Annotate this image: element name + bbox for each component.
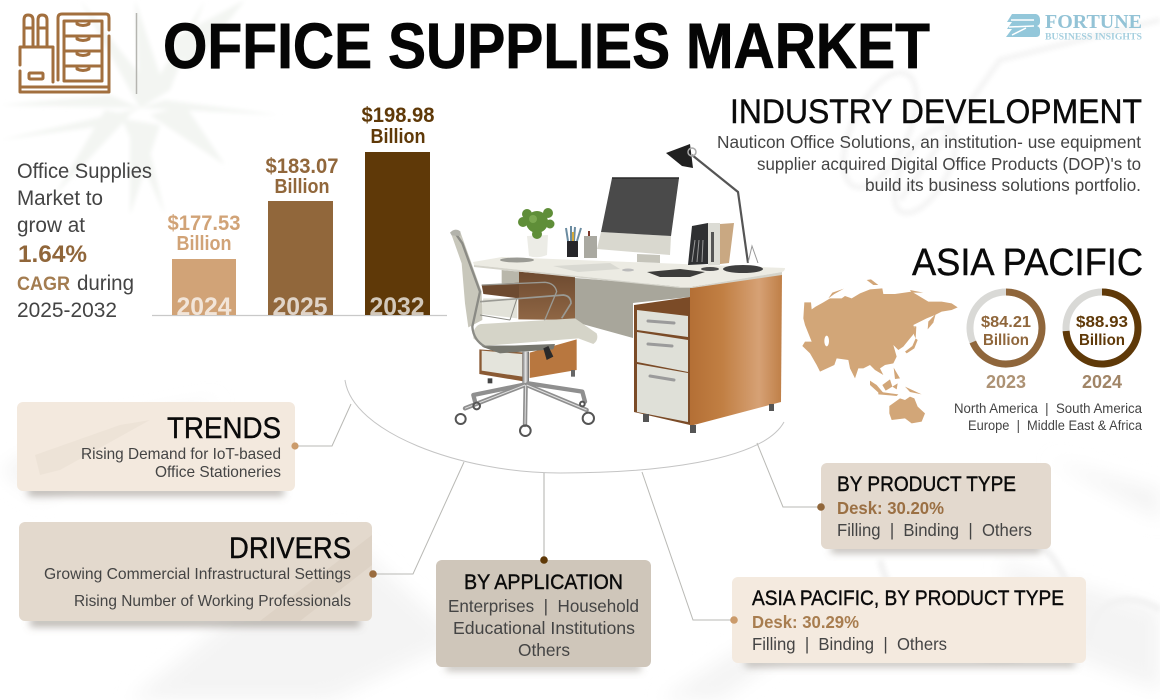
panel: drivers xyxy=(19,522,372,627)
panel: by application xyxy=(436,560,651,671)
panel: trends: Office Stationeries xyxy=(155,464,281,481)
panel: by product type: BY PRODUCT TYPE xyxy=(837,473,1016,496)
bar 2032: Billion xyxy=(370,126,426,148)
panel: Asia Pacific by product type: Desk: 30.29% xyxy=(752,612,859,632)
panel: by application: Educational Institutions xyxy=(453,618,635,638)
drawer pedestal xyxy=(634,297,774,433)
panel: trends: TRENDS xyxy=(167,412,281,445)
desk lamp xyxy=(666,144,763,273)
connector: by product type xyxy=(757,443,825,511)
donut 2023 xyxy=(970,292,1042,392)
bar chart: market size xyxy=(152,104,447,321)
industry development text xyxy=(717,132,1141,195)
industry development text: Nauticon Office Solutions, an institution- use equipment xyxy=(717,132,1141,152)
bar 2032: $198.98 xyxy=(362,104,435,127)
panel: Asia Pacific by product type: ASIA PACIFIC, BY PRODUCT TYPE xyxy=(752,587,1064,610)
logo: Fortune Business Insights xyxy=(1006,11,1142,42)
panel: by product type xyxy=(821,463,1051,553)
back panel xyxy=(575,278,690,338)
logo: Fortune Business Insights: BUSINESS INSIGHTS xyxy=(1045,32,1142,42)
papers xyxy=(500,258,534,262)
donut 2023: 2023 xyxy=(986,372,1026,392)
other regions list: North America | South America xyxy=(954,401,1142,416)
logo: Fortune Business Insights: FORTUNE xyxy=(1045,11,1142,33)
panel: Asia Pacific by product type: Filling | Binding | Others xyxy=(752,634,947,654)
bar 2032 xyxy=(362,104,435,321)
CAGR text block: grow at xyxy=(17,214,85,237)
panel: by application: Enterprises | Household xyxy=(448,596,639,616)
potted plant xyxy=(518,208,554,257)
header icon: pen holder and drawer cabinet xyxy=(20,14,109,92)
donut 2023: $84.21 xyxy=(981,314,1031,331)
keyboard and mouse xyxy=(553,263,634,272)
industry development text: supplier acquired Digital Office Products (DOP)'s to xyxy=(757,154,1141,174)
map: Asia Pacific xyxy=(802,279,958,423)
panel: trends: Rising Demand for IoT-based xyxy=(81,446,281,463)
panel: by application: Others xyxy=(518,640,570,660)
connector: drivers xyxy=(369,462,464,578)
heading: Asia Pacific: ASIA PACIFIC xyxy=(912,242,1143,284)
bar 2024 xyxy=(168,212,240,321)
connector: Asia Pacific by product type xyxy=(642,472,738,624)
bar 2025: $183.07 xyxy=(266,155,338,178)
title: OFFICE SUPPLIES MARKET xyxy=(163,10,930,82)
donut 2023: Billion xyxy=(983,332,1029,349)
donut 2024 xyxy=(1066,292,1138,392)
bar 2024: $177.53 xyxy=(168,212,240,235)
books xyxy=(688,223,734,265)
left pedestal xyxy=(479,270,577,383)
CAGR text block: CAGR xyxy=(17,273,70,295)
donut 2024: Billion xyxy=(1079,332,1125,349)
bar 2025 xyxy=(266,155,338,321)
panel: drivers: DRIVERS xyxy=(229,532,351,565)
panel: by product type: Filling | Binding | Others xyxy=(837,520,1032,540)
panel: drivers: Rising Number of Working Professionals xyxy=(74,593,351,610)
donut 2024: $88.93 xyxy=(1076,314,1128,331)
donut 2024: 2024 xyxy=(1082,372,1122,392)
connector arc under desk xyxy=(345,380,784,473)
pen cups xyxy=(566,226,597,258)
bar 2025: 2025 xyxy=(272,293,328,321)
CAGR text block: 2025-2032 xyxy=(17,299,117,322)
connector: trends xyxy=(291,404,351,450)
panel: Asia Pacific by product type xyxy=(732,577,1086,667)
CAGR text block: 1.64% xyxy=(18,241,87,268)
right wood side panel xyxy=(690,274,782,426)
bar 2032: 2032 xyxy=(370,293,424,321)
CAGR text block: Market to xyxy=(17,187,103,210)
CAGR text block xyxy=(17,160,152,322)
CAGR text block: during xyxy=(77,272,134,295)
office chair xyxy=(450,230,597,436)
monitor xyxy=(597,178,679,263)
heading: industry development: INDUSTRY DEVELOPMENT xyxy=(730,93,1142,131)
panel: by product type: Desk: 30.20% xyxy=(837,498,944,518)
tabletop xyxy=(473,257,785,287)
industry development text: build its business solutions portfolio. xyxy=(865,175,1141,195)
panel: drivers: Growing Commercial Infrastructural Settings xyxy=(44,566,351,583)
other regions list: Europe | Middle East & Africa xyxy=(968,418,1142,433)
illustration: office desk and chair xyxy=(450,144,785,436)
panel: by application: BY APPLICATION xyxy=(464,571,623,594)
connector: by application xyxy=(540,473,548,564)
CAGR text block: Office Supplies xyxy=(17,160,152,183)
panel: trends xyxy=(17,402,295,496)
tablet xyxy=(647,269,705,277)
other regions list xyxy=(954,401,1142,433)
bar 2025: Billion xyxy=(274,176,330,198)
bar 2024: 2024 xyxy=(176,293,232,321)
bar 2024: Billion xyxy=(176,233,232,255)
